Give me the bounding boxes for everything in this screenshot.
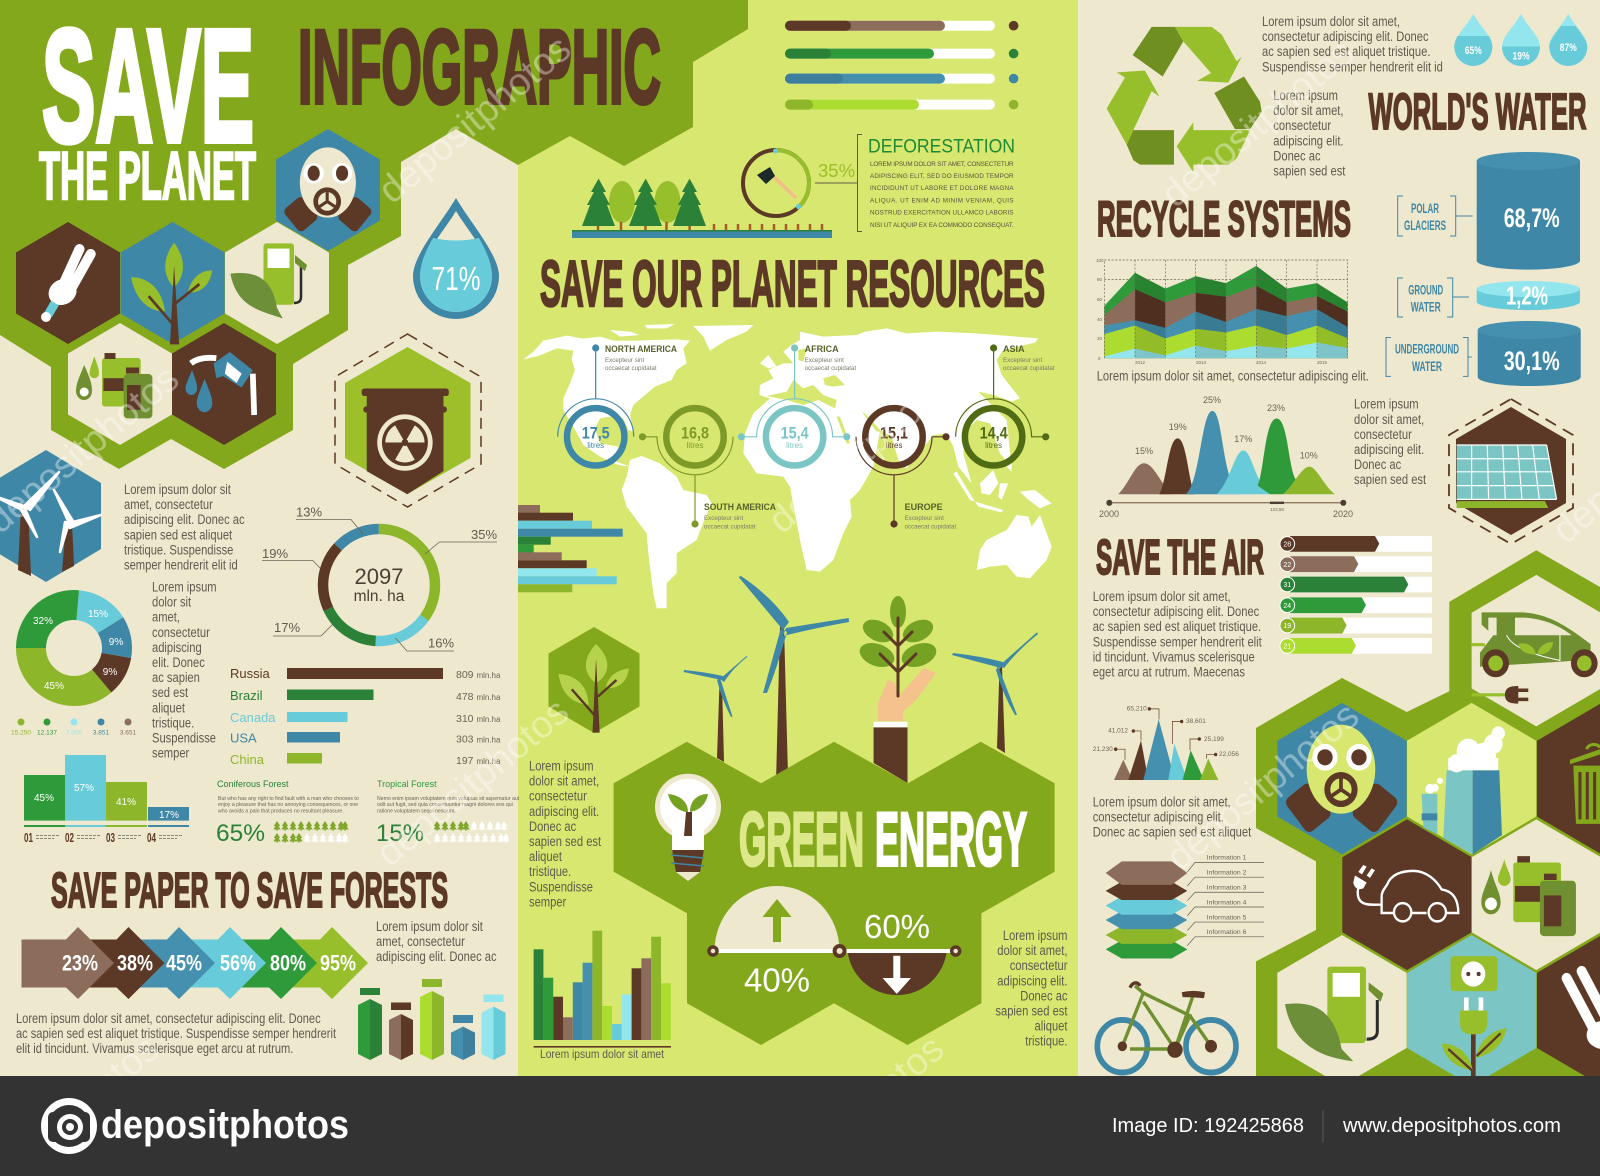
icon: radioactive barrel hexagon [335, 334, 481, 507]
legend: donut values: 7.000 [66, 730, 83, 736]
arrow chain percentages: 23% [62, 950, 98, 976]
text block: save the air: id tincidunt. Vivamus scelerisque [1093, 649, 1255, 665]
bar chart: forest by country [230, 666, 501, 767]
arrow bar chart: air: 22 [1283, 562, 1291, 569]
hex: bulb [1537, 935, 1600, 1086]
water labels and brackets: GROUND [1408, 282, 1443, 297]
histogram: 45 57 41 17: 57% [74, 783, 94, 794]
gauge 40% 60% [709, 886, 960, 998]
text block: energy left: Lorem ipsum [529, 758, 594, 774]
mountain chart: 2000 to 2020: 19% [1169, 422, 1187, 432]
text block: energy left: Suspendisse [529, 879, 593, 895]
histogram: 45 57 41 17: 45% [34, 793, 54, 804]
tropical forest stat: Tropical Forest [377, 779, 437, 789]
hex: factory [1407, 703, 1536, 854]
map region labels: AFRICA [805, 344, 839, 354]
tropical forest stat [376, 779, 520, 847]
text: SAVE OUR PLANET RESOURCES [540, 247, 1045, 320]
bar chart: forest by country: 197 mln.ha [456, 755, 501, 767]
text block: energy right: sapien sed est [995, 1003, 1068, 1019]
icon: eco light bulb [655, 774, 721, 881]
text block: mountain chart: Donec ac [1354, 457, 1401, 472]
water labels and brackets: WATER [1412, 359, 1442, 374]
histogram: 45 57 41 17: 02 [65, 831, 74, 845]
text block: energy right: consectetur [1010, 958, 1068, 974]
water drops [1454, 14, 1587, 66]
mountain chart: 2000 to 2020: 2000 [1099, 509, 1119, 519]
water drops: 19% [1512, 50, 1530, 62]
text: chart caption: Lorem ipsum dolor sit amet, consectetur adipiscing elit. [1097, 368, 1369, 384]
bar chart: forest by country: Canada [230, 710, 276, 725]
water labels and brackets: UNDERGROUND [1395, 342, 1459, 357]
icon: bicycle [1097, 983, 1236, 1073]
tropical forest stat: Nemo enim ipsam voluptatem quia voluptas sit aspernatur aut [377, 796, 520, 802]
title: save the planet [39, 0, 256, 214]
triangle peaks chart: 22,056 [1219, 751, 1239, 758]
stacked area chart: 2015 [1317, 360, 1328, 365]
coniferous forest stat: enjoy a pleasure that has no annoying consequences, or one [218, 802, 358, 808]
icon: biofuel pump [225, 222, 329, 344]
cylinder: polar glaciers [1477, 152, 1580, 270]
histogram: 45 57 41 17: 01 [24, 831, 33, 845]
text block: energy left: semper [529, 894, 566, 910]
text block: energy left: dolor sit amet, [529, 773, 599, 789]
text block: recycle top: Suspendisse semper hendrerit elit id [1262, 59, 1443, 75]
footer bar: Image ID: 192425868 [1112, 1115, 1304, 1137]
text block: recycle second: adipiscing elit. [1273, 133, 1344, 149]
hex: trash bin [1537, 703, 1600, 854]
arrow chain percentages: 38% [117, 950, 153, 976]
histogram: 45 57 41 17: 04 [147, 831, 156, 845]
mountain chart: 2000 to 2020: 123,58 [1270, 507, 1284, 512]
bar chart: bottom middle: Lorem ipsum dolor sit amet [540, 1047, 665, 1061]
text block: energy right: dolor sit amet, [997, 943, 1068, 958]
text block: beside donut: tristique. [152, 715, 194, 731]
watermark text: depositphotos [1159, 695, 1367, 879]
water drops: 65% [1465, 45, 1482, 57]
text block: mountain chart: dolor sit amet, [1354, 412, 1424, 427]
metric: north america 17,5: litres [587, 441, 604, 450]
bar chart: forest by country: 809 mln.ha [456, 669, 501, 681]
icon: hand holding plant [856, 596, 940, 783]
map region labels: Excepteur sint [905, 515, 944, 522]
icon: wind turbines hexagon [0, 450, 101, 582]
hexagon icon cluster top left [16, 129, 380, 445]
donut chart: 2097 mln ha: 35% [471, 527, 497, 542]
coniferous forest stat: 65% [216, 820, 265, 847]
cylinder: ground water [1477, 281, 1580, 311]
text block: recycle second: sapien sed est [1273, 163, 1346, 179]
metric: europe 15,1: litres [886, 441, 902, 450]
stacked area chart: 2012 [1135, 360, 1146, 365]
metric: europe 15,1 [856, 408, 949, 527]
hex: gas mask [1277, 703, 1407, 854]
gauge 40% 60%: 60% [864, 908, 930, 945]
text block: save the air: ac sapien sed est aliquet tristique. [1093, 619, 1261, 635]
arrow chain percentages: 95% [320, 950, 356, 976]
water labels and brackets: POLAR [1411, 201, 1439, 216]
text block: peaks: consectetur adipiscing elit. [1093, 809, 1224, 825]
text block: energy right: tristique. [1025, 1034, 1068, 1049]
donut chart: small percentages [31, 605, 123, 692]
text block: left intro: Lorem ipsum dolor sit [124, 482, 231, 497]
bar chart: forest by country: 478 mln.ha [456, 691, 501, 703]
arrow bar chart: air [1280, 536, 1432, 654]
arrow chain percentages [22, 927, 368, 999]
coniferous forest stat: Coniferous Forest [217, 779, 289, 789]
map region labels: occaecat cupidatat [805, 365, 856, 372]
mountain chart: 2000 to 2020: 25% [1203, 395, 1221, 405]
text block: recycle second: Lorem ipsum [1273, 88, 1338, 103]
text block: left intro: tristique. Suspendisse [124, 542, 233, 558]
text block: mountain chart: adipiscing elit. [1354, 442, 1424, 457]
cylinder chart: world water [1386, 152, 1581, 386]
map seas [767, 348, 882, 443]
map region labels: Excepteur sint [704, 515, 743, 522]
mountain chart: 2000 to 2020: 17% [1234, 434, 1252, 444]
text block: beside donut: aliquet [152, 700, 185, 716]
text block: energy left: Donec ac [529, 819, 576, 834]
bar chart: forest by country: China [230, 752, 265, 767]
arrow: down [883, 956, 911, 994]
bar chart: bottom middle [534, 931, 671, 1061]
text block: beside donut: sed est [152, 685, 188, 701]
text block: energy left: tristique. [529, 864, 571, 880]
histogram: 45 57 41 17 [24, 755, 189, 845]
text block: left intro: amet, consectetur [124, 497, 213, 512]
water drop 71% [413, 198, 499, 319]
heading: save paper to save forests: SAVE PAPER TO SAVE FORESTS [51, 864, 448, 918]
stacked area chart: 100 [1096, 258, 1104, 263]
metric: asia 14,4: litres [985, 441, 1002, 450]
cylinder: underground water: 30,1% [1504, 346, 1560, 376]
tropical forest stat: odit aut fugit, sed quia consequuntur magni dolores eos qui [377, 802, 513, 808]
stacked layers chart: Information 4 [1207, 899, 1247, 906]
text: SAVE THE AIR [1096, 531, 1264, 585]
deforestation text block: LOREM IPSUM DOLOR SIT AMET, CONSECTETUR [870, 161, 1014, 168]
bar chart: forest by country: Brazil [230, 688, 263, 703]
map region labels: Excepteur sint [805, 357, 844, 364]
text block: energy left: sapien sed est [529, 834, 602, 849]
text block: beside donut: ac sapien [152, 670, 200, 685]
text block: energy left: aliquet [529, 849, 562, 864]
triangle peaks chart: 25,199 [1204, 736, 1224, 743]
map region labels: SOUTH AMERICA [704, 502, 776, 512]
deforestation text block: 35% [818, 160, 855, 181]
stacked area chart [1096, 258, 1348, 365]
deforestation text block [815, 134, 1015, 232]
cylinder: polar glaciers: 68,7% [1504, 203, 1560, 233]
water drops: 87% [1560, 42, 1577, 54]
map region labels: occaecat cupidatat [1003, 365, 1055, 372]
arrow: up [762, 899, 792, 942]
donut chart: 2097 mln ha: 17% [274, 620, 300, 635]
stacked area chart: 20 [1097, 336, 1103, 341]
text block: paper bottom: Lorem ipsum dolor sit amet, consectetur adipiscing elit. Donec [16, 1011, 321, 1026]
icon: light bulb [16, 222, 120, 344]
text block: recycle second: dolor sit amet, [1273, 103, 1344, 118]
donut chart: small percentages: 9% [103, 667, 117, 678]
watermark text: depositphotos [369, 691, 577, 875]
triangle peaks chart: 38,601 [1186, 718, 1206, 725]
arrow chain percentages: 45% [166, 950, 202, 976]
metric: asia 14,4: 14,4 [980, 424, 1008, 443]
green energy hexagon panel [614, 742, 1055, 1045]
mountain chart: 2000 to 2020: 23% [1267, 403, 1285, 413]
map region labels: occaecat cupidatat [704, 524, 756, 531]
cylinder: ground water: 1,2% [1506, 281, 1548, 311]
bar chart: forest by country: Russia [230, 666, 271, 681]
text block: energy left: consectetur [529, 789, 587, 804]
arrow bar chart: air: 24 [1283, 603, 1291, 610]
text block: mountain chart: Lorem ipsum [1354, 397, 1419, 412]
map region labels: ASIA [1003, 344, 1025, 354]
deforestation text block: NOSTRUD EXERCITATION ULLAMCO LABORIS [870, 210, 1014, 216]
triangle peaks chart: 21,230 [1093, 746, 1113, 753]
text: ENERGY [875, 798, 1027, 882]
cylinder: underground water [1478, 321, 1581, 386]
triangle peaks chart [1093, 706, 1239, 780]
histogram: 45 57 41 17: 41% [116, 797, 136, 808]
water labels and brackets: WATER [1411, 300, 1441, 315]
tropical forest stat: 15% [376, 820, 424, 847]
stacked layers chart: Information 5 [1207, 914, 1247, 921]
donut chart: 2097 mln ha [262, 504, 497, 651]
map region labels [605, 344, 1055, 531]
text block: recycle second: consectetur [1273, 118, 1331, 134]
triangle peaks chart: 41,012 [1108, 728, 1128, 735]
hexagon cluster bottom right [1256, 550, 1600, 1100]
metric: africa 15,4: 15,4 [781, 424, 809, 443]
text block: paper bottom: ac sapien sed est aliquet tristique. Suspendisse semper hendrerit [16, 1026, 336, 1041]
water labels and brackets [1386, 196, 1473, 376]
stacked area chart: 0 [1098, 356, 1101, 361]
text block: save the air: consectetur adipiscing elit. Donec [1093, 604, 1259, 619]
metric: europe 15,1: 15,1 [880, 424, 908, 443]
text block: left intro: semper hendrerit elit id [124, 557, 238, 573]
hex: socket plant [1407, 935, 1536, 1086]
text block: recycle top: Lorem ipsum dolor sit amet, [1262, 14, 1400, 29]
donut chart: 2097 mln ha: 13% [296, 504, 322, 520]
watermark text: depositphotos [371, 28, 579, 212]
icon: recycle symbol [1107, 27, 1262, 172]
footer bar: depositphotos [101, 1103, 349, 1147]
tropical forest stat: ratione voluptatem sequi nesciunt. [377, 808, 456, 814]
text block: energy right: Donec ac [1020, 988, 1068, 1004]
text block: mountain chart: consectetur [1354, 427, 1412, 442]
metric: south america 16,8: litres [687, 441, 703, 450]
icon: axe in ring [743, 148, 809, 216]
mountain chart: 2000 to 2020: 10% [1300, 451, 1318, 461]
text block: beside donut: elit. Donec [152, 655, 205, 670]
text block: peaks: Donec ac sapien sed est aliquet [1093, 824, 1252, 840]
legend: donut values: 3.651 [120, 730, 137, 736]
legend: donut values: 3.851 [93, 730, 110, 736]
metric: africa 15,4 [738, 345, 850, 465]
arrow bar chart: air: 31 [1283, 582, 1291, 589]
text block: save the air: eget arcu at rutrum. Maecenas [1093, 664, 1245, 680]
world map [523, 324, 1052, 608]
metric: asia 14,4 [956, 345, 1049, 465]
deforestation text block: INCIDIDUNT UT LABORE ET DOLORE MAGNA [870, 185, 1014, 192]
mountain chart: 2000 to 2020: 2020 [1333, 509, 1353, 519]
arrow chain percentages: 80% [270, 950, 306, 976]
title: save the planet: THE PLANET [39, 138, 256, 214]
mountain chart: 2000 to 2020 [1099, 395, 1353, 519]
coniferous forest stat: who avoids a pain that produces no resultant pleasure. [218, 808, 344, 814]
heading: recycle systems: RECYCLE SYSTEMS [1097, 191, 1351, 247]
donut chart: 2097 mln ha: 16% [428, 636, 454, 650]
text block: left intro: sapien sed est aliquet [124, 527, 233, 543]
3d column chart [358, 979, 506, 1060]
deforestation text block: DEFORESTATION [868, 136, 1015, 158]
legend: donut values: 15.250 [11, 730, 31, 736]
footer bar: www.depositphotos.com [1342, 1115, 1561, 1137]
water labels and brackets: GLACIERS [1404, 218, 1446, 233]
deforestation text block: NISI UT ALIQUIP EX EA COMMODO CONSEQUAT. [870, 222, 1014, 229]
text block: recycle top: consectetur adipiscing elit. Donec [1262, 29, 1429, 44]
hex: electric car [1472, 575, 1600, 726]
map region labels: EUROPE [905, 502, 943, 512]
metric: north america 17,5: 17,5 [582, 424, 610, 443]
icon: gas mask [276, 129, 380, 251]
gauge 40% 60%: 40% [744, 962, 810, 998]
stacked layers chart: Information 2 [1207, 870, 1247, 877]
coniferous forest stat [216, 779, 359, 847]
donut chart: 2097 mln ha: 2097 [355, 564, 403, 589]
text block: energy right: adipiscing elit. [997, 973, 1068, 989]
icon: solar panel hexagon [1449, 399, 1573, 544]
arrow bar chart: air: 28 [1283, 542, 1291, 548]
arrow bar chart: air: 19 [1283, 623, 1291, 630]
stacked layers chart: Information 3 [1207, 884, 1247, 892]
map region labels: occaecat cupidatat [605, 365, 657, 372]
horizontal bars left of map [518, 505, 623, 592]
metric: north america 17,5 [558, 345, 634, 465]
stacked area chart: 80 [1097, 277, 1103, 282]
text block: peaks: Lorem ipsum dolor sit amet, [1093, 794, 1231, 810]
map region labels: occaecat cupidatat [905, 524, 956, 531]
icon: chemical bottles [68, 323, 172, 445]
metric: south america 16,8 [640, 408, 733, 527]
stacked layers chart [1106, 855, 1264, 959]
title: save the planet: SAVE [42, 0, 254, 175]
map region labels: Excepteur sint [1003, 357, 1042, 364]
text block: paper right: amet, consectetur [376, 934, 465, 949]
stacked layers chart: Information 1 [1207, 855, 1247, 862]
arrow chain percentages: 56% [220, 950, 256, 976]
water drop 71%: 71% [432, 260, 480, 297]
bar chart: forest by country: USA [230, 730, 257, 746]
triangle peaks chart: 65,210 [1127, 706, 1147, 713]
legend: donut values: 12.137 [37, 730, 57, 736]
text block: energy left: adipiscing elit. [529, 804, 599, 819]
metric: africa 15,4: litres [786, 441, 803, 450]
text: INFOGRAPHIC [298, 9, 661, 126]
progress bars top [785, 21, 1018, 110]
bar chart: forest by country: 303 mln.ha [456, 734, 501, 746]
metric: south america 16,8: 16,8 [681, 424, 709, 443]
donut chart: small percentages: 9% [109, 637, 123, 648]
circle metrics on map [558, 345, 1049, 527]
histogram: 45 57 41 17: 03 [106, 831, 115, 845]
forest strip illustration [572, 179, 832, 238]
icon: footer camera logo [41, 1098, 97, 1154]
histogram: 45 57 41 17: 17% [159, 810, 179, 821]
bar chart: forest by country: 310 mln.ha [456, 713, 501, 725]
icon: fuel nozzle [172, 323, 276, 445]
hex: electric car outline [1342, 819, 1472, 970]
heading: green energy: GREEN [739, 798, 864, 882]
text block: beside donut: adipiscing [152, 640, 202, 655]
text block: paper right: adipiscing elit. Donec ac [376, 949, 497, 965]
icon: wind turbines [684, 576, 1038, 782]
text block: left intro: adipiscing elit. Donec ac [124, 512, 245, 528]
donut chart: small percentages: 45% [44, 681, 64, 692]
coniferous forest stat: But who has any right to find fault with a man who chooses to [218, 796, 359, 802]
icon: plant hexagon [548, 627, 640, 733]
stacked area chart: 60 [1097, 297, 1103, 302]
text block: beside donut: dolor sit [152, 594, 192, 610]
hex: biofuel pump [1277, 935, 1407, 1086]
icon: tree [121, 222, 225, 344]
text block: save the air: Lorem ipsum dolor sit amet, [1093, 589, 1231, 604]
donut chart: 2097 mln ha: 19% [262, 546, 288, 561]
text block: paper right: Lorem ipsum dolor sit [376, 919, 483, 934]
text block: beside donut: semper [152, 745, 189, 761]
legend: donut values [11, 718, 137, 736]
text block: recycle top: ac sapien sed est aliquet tristique. [1262, 44, 1430, 60]
map region labels: NORTH AMERICA [605, 344, 677, 354]
text block: recycle second: Donec ac [1273, 148, 1321, 164]
text block: energy right: Lorem ipsum [1003, 928, 1068, 943]
stacked layers chart: Information 6 [1207, 929, 1247, 936]
map region labels: Excepteur sint [605, 357, 644, 364]
text block: save the air: Suspendisse semper hendrerit elit [1093, 634, 1262, 650]
arrow bar chart: air: 21 [1283, 644, 1291, 650]
watermark text: depositphotos [1154, 32, 1362, 216]
text block: mountain chart: sapien sed est [1354, 472, 1427, 488]
stacked area chart: 40 [1097, 317, 1103, 322]
deforestation text block: ALIQUA. UT ENIM AD MINIM VENIAM, QUIS [870, 198, 1014, 204]
watermark text: depositphotos [761, 358, 969, 542]
donut chart: small percentages: 32% [33, 616, 53, 627]
text block: beside donut: Lorem ipsum [152, 579, 217, 595]
footer bar [0, 1076, 1600, 1176]
deforestation text block: ADIPISCING ELIT, SED DO EIUSMOD TEMPOR [870, 173, 1014, 180]
text block: beside donut: consectetur [152, 625, 210, 640]
stacked area chart: 2013 [1196, 360, 1207, 365]
text block: paper bottom: elit id tincidunt. Vivamus scelerisque eget arcu at rutrum. [16, 1041, 293, 1057]
text block: beside donut: Suspendisse [152, 730, 216, 746]
text block: energy right: aliquet [1035, 1018, 1068, 1034]
hex: bottles [1472, 819, 1600, 970]
donut chart: small percentages: 15% [88, 609, 108, 620]
stacked area chart: 2014 [1256, 360, 1267, 365]
mountain chart: 2000 to 2020: 15% [1135, 446, 1153, 456]
header green band [0, 0, 748, 469]
donut chart: 2097 mln ha: mln. ha [354, 588, 405, 605]
text block: beside donut: amet, [152, 610, 180, 625]
